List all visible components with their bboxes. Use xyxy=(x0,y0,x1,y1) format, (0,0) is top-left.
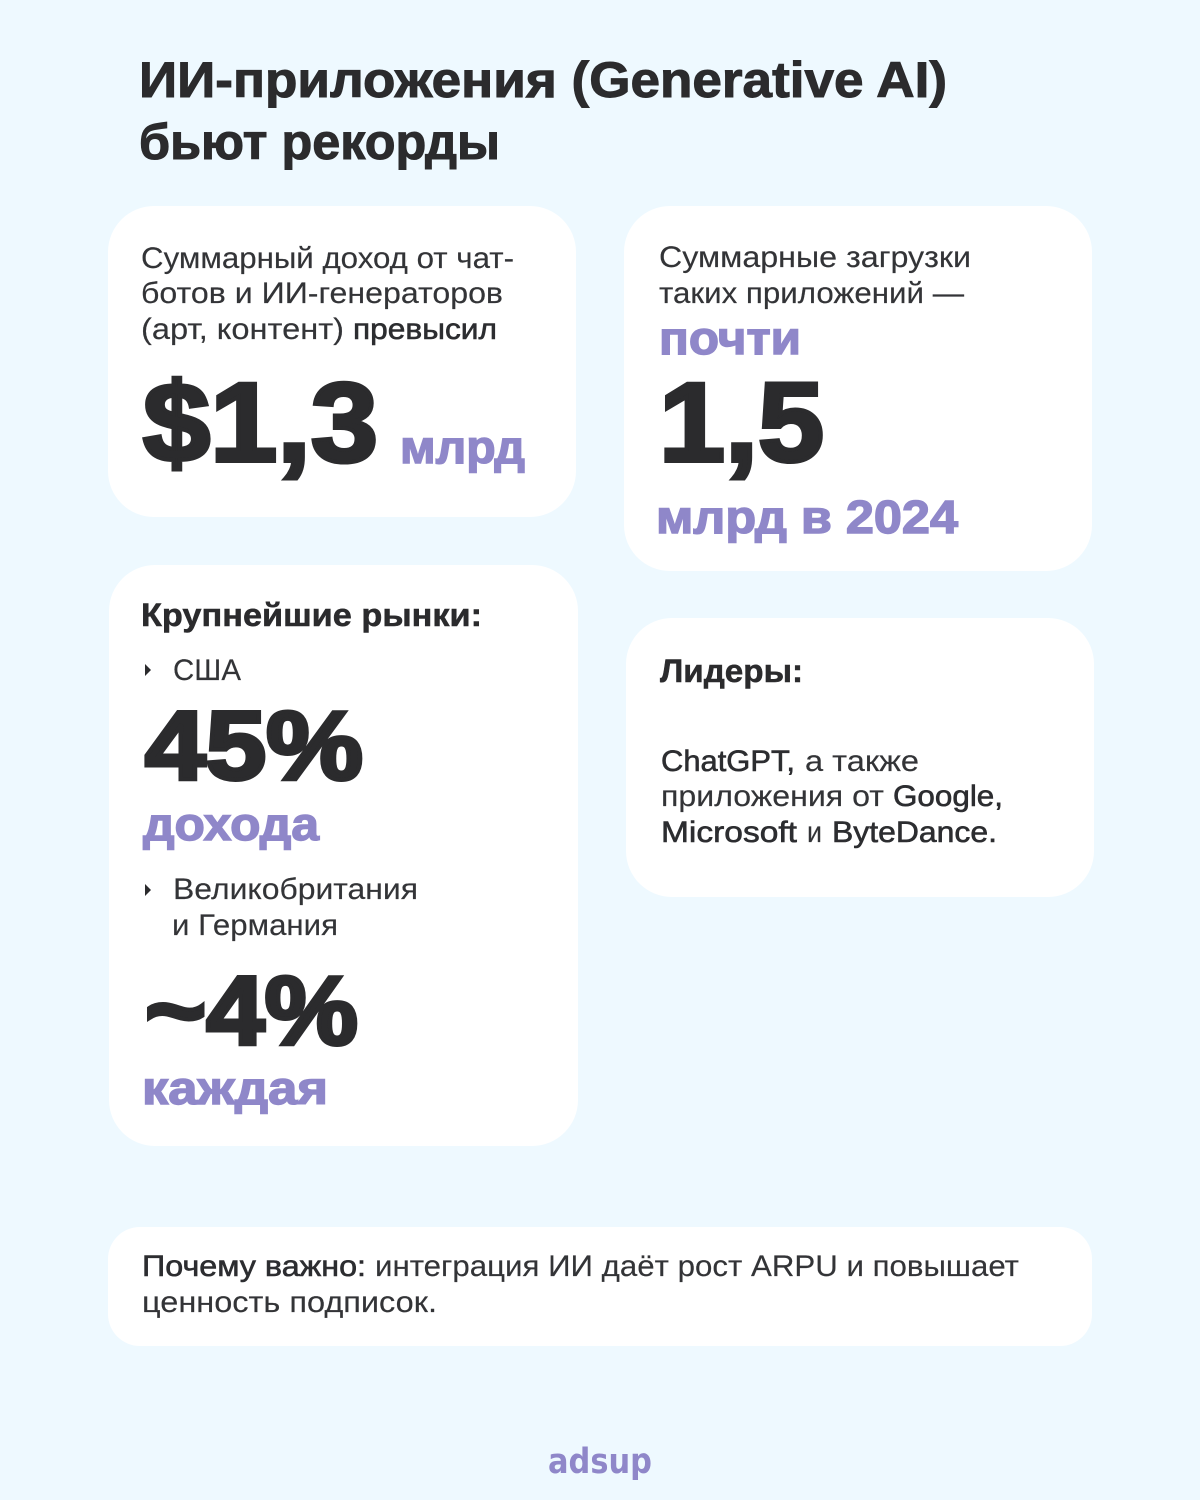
panel: total downloads xyxy=(624,206,1092,571)
leaders text xyxy=(661,745,1003,849)
leaders text: ByteDance. xyxy=(832,816,997,849)
revenue figure: млрд xyxy=(400,421,525,473)
panel: why it matters xyxy=(108,1227,1092,1346)
revenue description: (арт, контент) xyxy=(141,313,344,346)
downloads figure: млрд в 2024 xyxy=(656,491,958,543)
panel: largest markets xyxy=(109,565,578,1146)
revenue figure xyxy=(143,360,525,485)
leaders text: Microsoft xyxy=(661,816,798,849)
revenue figure: $1,3 xyxy=(143,360,378,485)
why it matters text: интеграция ИИ даёт рост ARPU и повышает xyxy=(375,1250,1019,1283)
revenue description: ботов и ИИ-генераторов xyxy=(141,277,503,310)
USA figure xyxy=(143,691,363,850)
leaders text: а также xyxy=(805,745,919,778)
revenue description xyxy=(141,242,514,346)
downloads description xyxy=(659,241,971,310)
revenue description: превысил xyxy=(353,313,497,346)
USA figure: 45% xyxy=(145,691,363,800)
title: бьют рекорды xyxy=(139,114,500,170)
why it matters text xyxy=(142,1250,1019,1319)
why it matters text: ценность подписок. xyxy=(142,1286,437,1319)
title: ИИ-приложения (Generative AI) xyxy=(139,52,947,108)
icon: bullet USA xyxy=(145,664,151,676)
icon: bullet UK and Germany xyxy=(145,884,151,896)
title xyxy=(139,52,947,170)
label: UK and Germany: и Германия xyxy=(172,909,338,942)
logo: adsup: adsup xyxy=(548,1442,652,1482)
downloads figure xyxy=(656,312,958,543)
downloads description: Суммарные загрузки xyxy=(659,241,971,274)
panel: total revenue xyxy=(108,206,576,517)
UK and Germany figure xyxy=(142,956,358,1114)
UK and Germany figure: ~4% xyxy=(145,956,358,1065)
revenue description: Суммарный доход от чат- xyxy=(141,242,514,275)
markets heading: Крупнейшие рынки: xyxy=(141,597,482,633)
USA figure: дохода xyxy=(143,798,319,850)
leaders text: ChatGPT, xyxy=(661,745,795,778)
why it matters text: Почему важно: xyxy=(142,1250,366,1283)
leaders text: и xyxy=(807,816,822,849)
downloads figure: 1,5 xyxy=(659,360,824,485)
leaders text: приложения от xyxy=(661,780,884,813)
downloads figure: почти xyxy=(659,312,801,364)
panel: leaders xyxy=(626,618,1094,897)
leaders heading: Лидеры: xyxy=(660,653,803,689)
label: UK and Germany: Великобритания xyxy=(173,873,418,906)
label: UK and Germany xyxy=(172,873,418,942)
UK and Germany figure: каждая xyxy=(142,1062,328,1114)
label: USA: США xyxy=(173,654,241,687)
downloads description: таких приложений — xyxy=(659,277,964,310)
leaders text: Google, xyxy=(893,780,1003,813)
